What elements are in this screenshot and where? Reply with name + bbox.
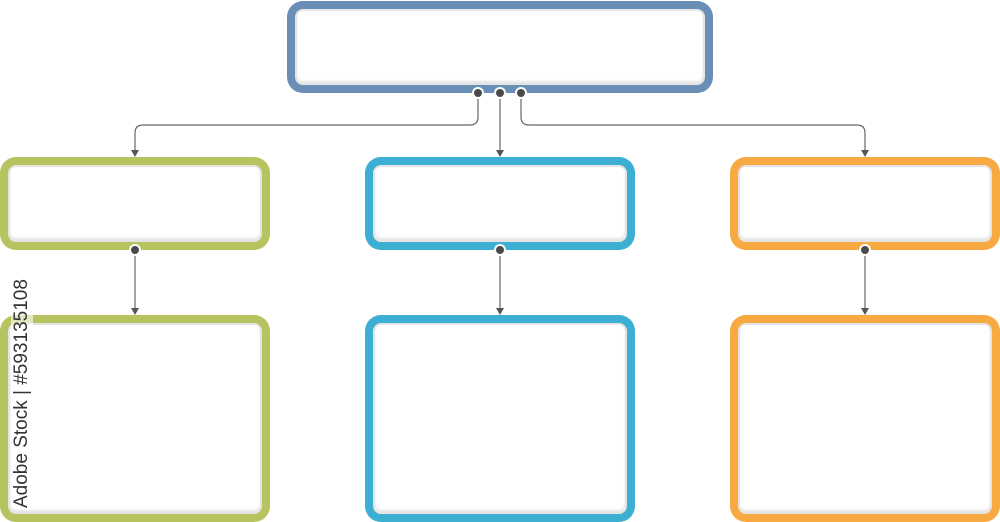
center middle box [365, 157, 635, 250]
left middle box [0, 157, 270, 250]
top box [287, 1, 713, 93]
center bottom box [365, 315, 635, 522]
right middle box [730, 157, 1000, 250]
left bottom box [0, 315, 270, 522]
right bottom box [730, 315, 1000, 522]
watermark label: Adobe Stock | #593135108 [11, 279, 32, 508]
